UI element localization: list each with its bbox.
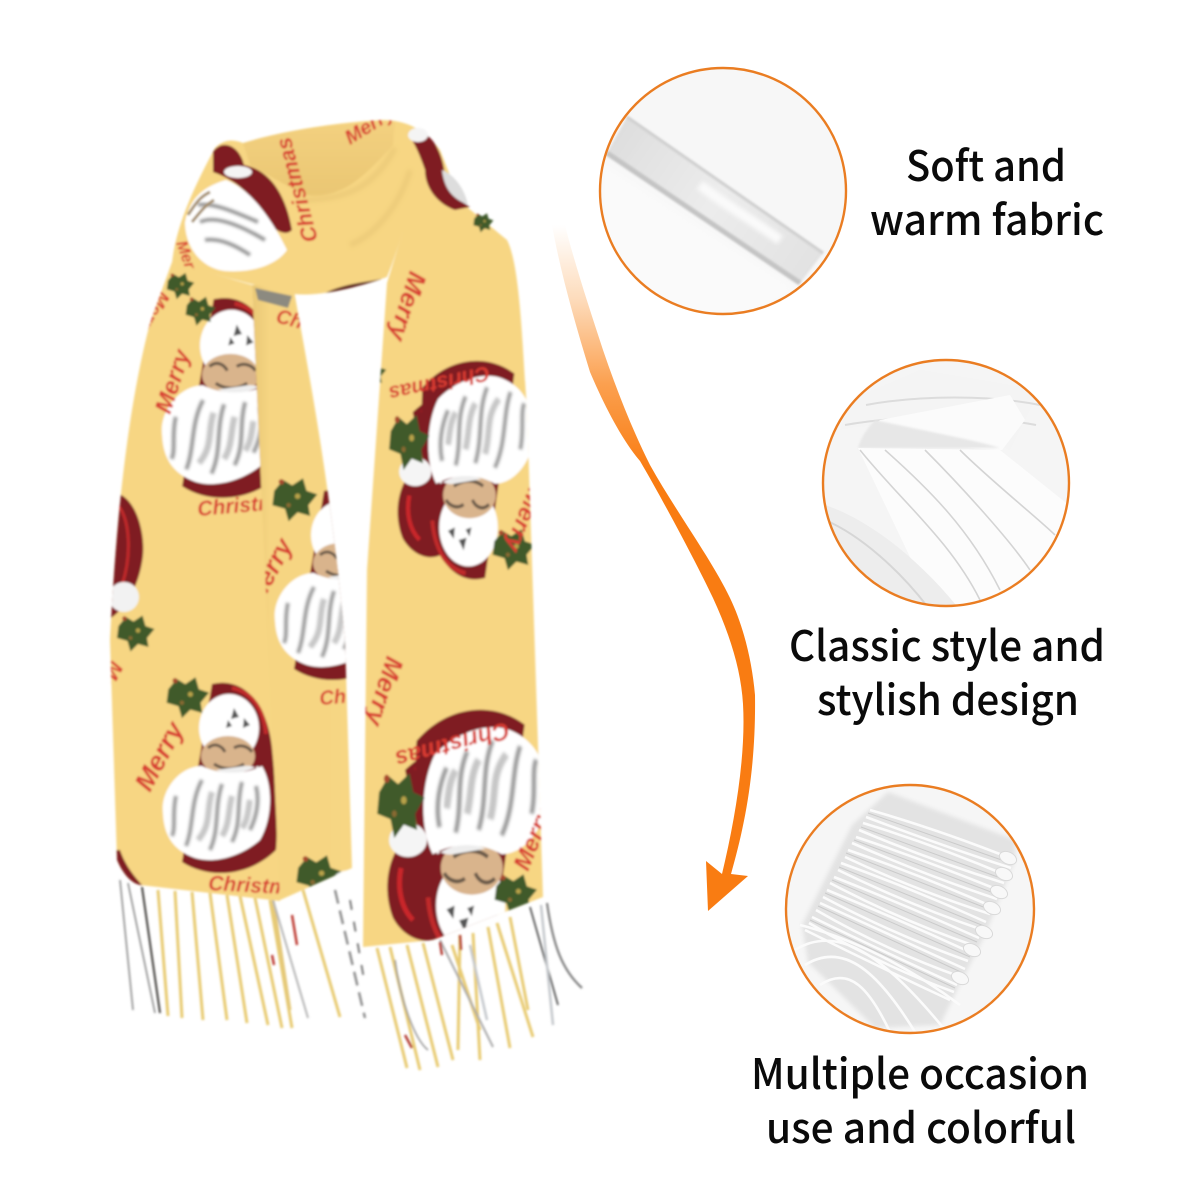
santa hair: neck (188, 192, 214, 222)
santa motif: right panel upper (389, 361, 533, 579)
santa motif: inner strip (273, 489, 348, 682)
santa pompom: left edge (109, 582, 139, 612)
christmas label: inner strip: Christmas (319, 680, 418, 710)
santa motif: front lower (163, 683, 277, 873)
scarf fringe: left end (120, 880, 365, 1028)
merry label: right panel edge: Merry (359, 653, 410, 731)
santa hat: left edge (108, 492, 143, 620)
scarf panel: left front end (108, 262, 281, 902)
santa fragment: inner strip bottom (334, 869, 346, 877)
caption: classic style and stylish design: stylish design (817, 667, 1079, 728)
holly: right panel middle (493, 529, 535, 570)
holly: front lower (167, 677, 209, 718)
scarf panel: right hanging end (362, 178, 544, 948)
holly: right panel bottom (495, 874, 537, 915)
curved orange arrow (552, 225, 755, 911)
merry label: left edge: Merry (82, 658, 127, 717)
fold shadows (309, 164, 385, 229)
detail circle: tassels (786, 785, 1034, 1033)
christmas label: front lower: Christmas (208, 872, 312, 900)
christmas label: right panel lower: Christmas (392, 716, 512, 773)
christmas label: front upper: Christmas (196, 489, 301, 521)
merry label: inner strip: Merry (239, 532, 299, 610)
caption: soft and warm fabric (870, 133, 1104, 248)
caption: multiple occasion use and colorful: use and colorful (766, 1095, 1076, 1156)
caption: classic style and stylish design (789, 613, 1105, 728)
detail circle: soft fabric (600, 68, 846, 320)
santa fur: neck (224, 166, 252, 178)
scarf product (82, 101, 582, 1070)
caption: multiple occasion use and colorful (751, 1041, 1089, 1156)
holly: inner strip lower (295, 854, 342, 888)
santa hat: neck (213, 145, 292, 233)
santa motif: right panel lower (376, 708, 542, 942)
santa hat edge under neck (325, 278, 385, 295)
merry label: neck left: Merry (172, 239, 203, 286)
merry label: right panel middle: Merry (498, 485, 548, 557)
holly: front top (186, 297, 216, 326)
merry label: front top: Merry (132, 288, 174, 341)
merry label: right panel top: Merry (382, 268, 433, 346)
christmas label: neck: Christmas (271, 135, 323, 245)
neck inner fold (246, 138, 391, 196)
scarf neck loop (172, 101, 455, 295)
christmas label: inner strip top: Christmas (274, 306, 374, 352)
beard shading: neck (198, 204, 265, 255)
santa fragment: front bottom-left (115, 848, 143, 887)
scarf fringe: right end (377, 903, 582, 1070)
christmas label: neck top: Merry (341, 101, 400, 149)
caption: multiple occasion use and colorful: Multiple occasion (751, 1041, 1089, 1102)
merry label: front upper: Merry (150, 345, 196, 417)
scarf panel: inner back strip (239, 285, 418, 910)
caption: classic style and stylish design: Classic style and (789, 613, 1105, 674)
fold band (607, 117, 823, 283)
christmas label: right panel upper: Christmas (387, 361, 492, 405)
holly: inner strip upper (272, 478, 317, 521)
holly: left edge (117, 616, 154, 652)
santa motif: right shoulder (408, 128, 493, 232)
holly: right panel edge (378, 367, 387, 384)
merry label: right panel lower: Merry (509, 802, 559, 874)
caption: soft and warm fabric: Soft and (906, 133, 1066, 194)
santa motif: front upper (160, 296, 262, 500)
caption: soft and warm fabric: warm fabric (870, 187, 1104, 248)
merry label: front lower: Merry (129, 715, 191, 796)
santa beard: neck (185, 180, 287, 271)
detail circle: pleated style (823, 360, 1075, 620)
holly: front top edge (167, 273, 194, 299)
